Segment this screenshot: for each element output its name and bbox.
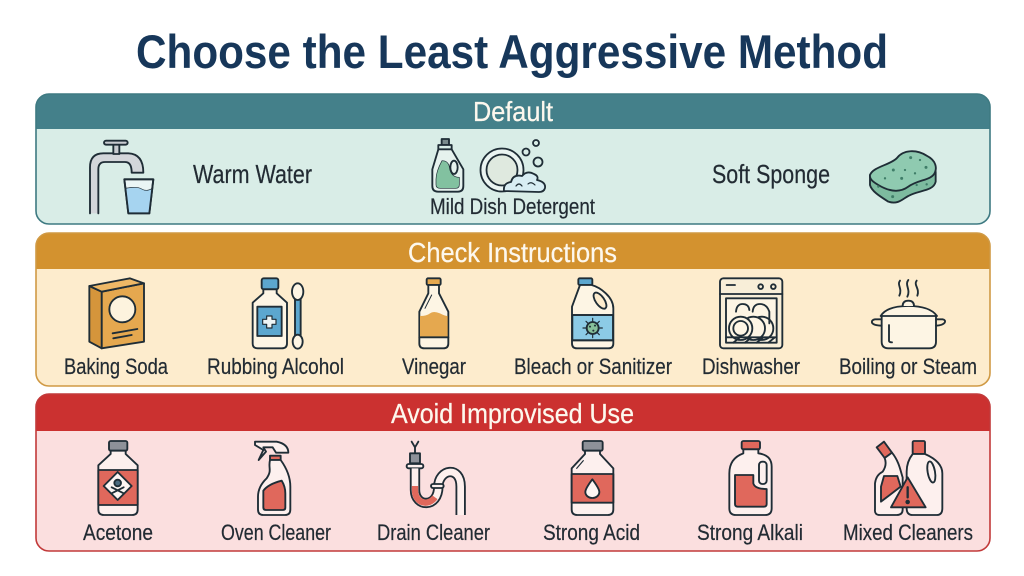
icon: drain pipe [407, 442, 461, 515]
icon: rubbing alcohol and cotton swab [253, 278, 303, 349]
label: drain cleaner: Drain Cleaner [377, 520, 490, 545]
label: mixed cleaners: Mixed Cleaners [843, 520, 973, 545]
panel: check instructions [36, 233, 990, 386]
icon: bleach jug with germ [572, 278, 613, 348]
icon: dishwasher [720, 278, 782, 348]
icon: sponge [870, 151, 936, 203]
panel: default [36, 94, 990, 224]
icon: tap and glass of water [90, 141, 153, 213]
label: rubbing alcohol: Rubbing Alcohol [207, 354, 344, 379]
heading: default: Default [473, 96, 553, 127]
label: mild dish detergent: Mild Dish Detergent [430, 194, 595, 219]
label: boiling or steam: Boiling or Steam [839, 354, 977, 379]
label: dishwasher: Dishwasher [702, 354, 800, 379]
heading: check instructions: Check Instructions [408, 237, 617, 268]
icon: oven cleaner spray bottle [255, 442, 290, 515]
icon: mixed cleaners with warning triangle [875, 441, 942, 515]
title: Choose the Least Aggressive Method [136, 25, 888, 78]
icon: vinegar bottle [419, 278, 448, 348]
icon: baking soda box [89, 278, 144, 348]
icon: plate with foam and bubbles [480, 140, 545, 192]
label: baking soda: Baking Soda [64, 354, 169, 379]
icon: steaming pot [872, 280, 945, 348]
label: strong alkali: Strong Alkali [697, 520, 803, 545]
label: acetone: Acetone [83, 520, 153, 545]
panel: avoid improvised use [36, 394, 990, 551]
icon: strong acid bottle [572, 441, 613, 515]
label: bleach or sanitizer: Bleach or Sanitizer [514, 354, 672, 379]
label: oven cleaner: Oven Cleaner [221, 520, 331, 545]
icon: acetone bottle with hazard label [98, 441, 138, 515]
icon: dish detergent bottle [432, 139, 463, 192]
heading: avoid improvised use: Avoid Improvised Use [391, 398, 634, 429]
icon: strong alkali jug [729, 441, 772, 515]
label: strong acid: Strong Acid [543, 520, 640, 545]
label: vinegar: Vinegar [402, 354, 466, 379]
label: warm water: Warm Water [193, 159, 312, 189]
label: soft sponge: Soft Sponge [712, 159, 830, 189]
